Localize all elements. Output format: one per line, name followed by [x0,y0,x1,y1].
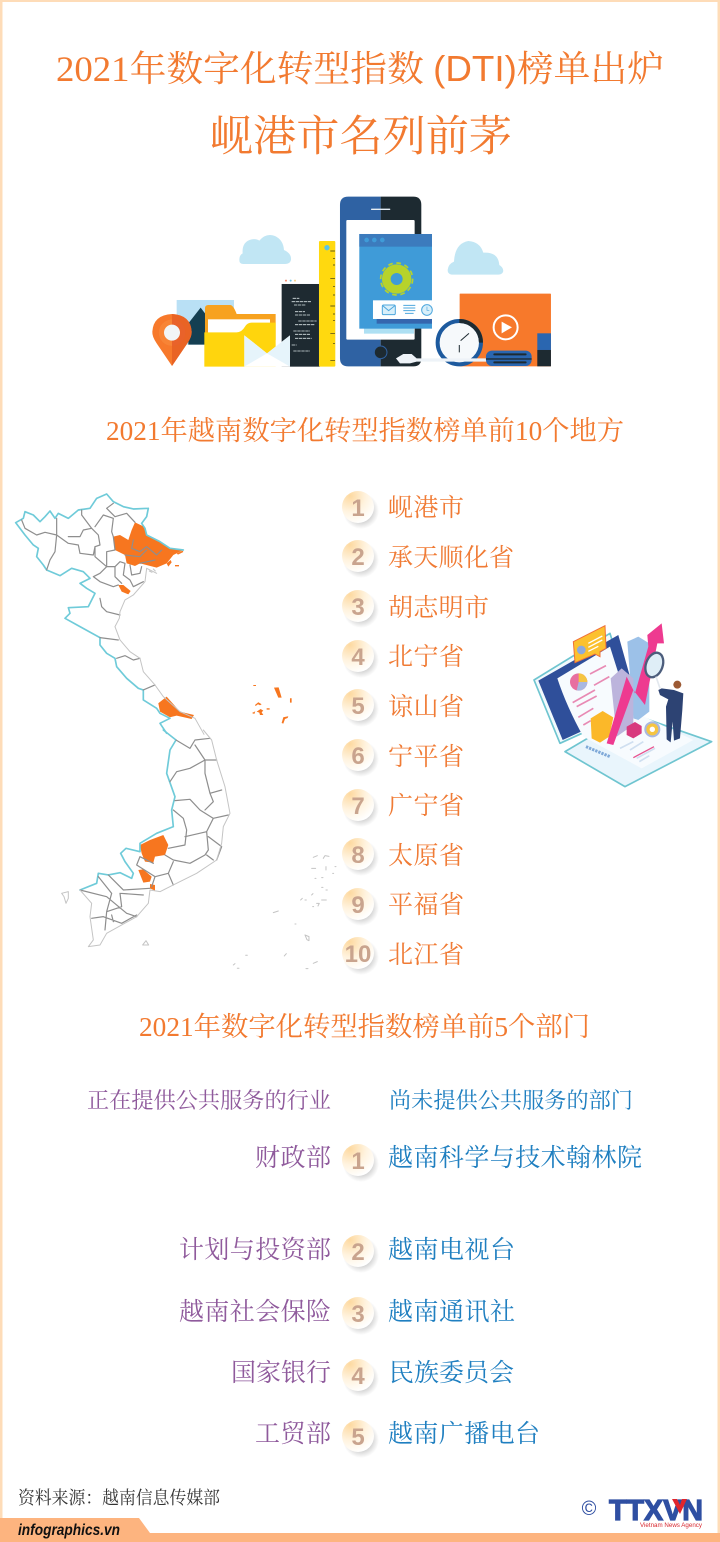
icon: cloud right [448,241,503,275]
rank 9: 9 [351,892,365,919]
column header: agencies not providing public services: 尚未提供公共服务的部门 [389,1088,633,1113]
rank 1 [342,491,464,529]
icon: folder [204,305,276,367]
row 1: 财政部 [255,1144,331,1172]
rank 4: 北宁省 [388,643,464,671]
analyst figure [658,681,683,742]
row 5: 越南广播电台 [388,1420,540,1448]
icon: app window with gear [359,234,432,334]
map: Vietnam north [16,494,292,734]
rank 7: 7 [351,793,365,820]
row 2: 越南电视台 [388,1236,515,1264]
islands [233,856,336,969]
border teal north [16,494,183,733]
row 4: 国家银行 [231,1359,331,1387]
row 1 [255,1144,642,1182]
list: top 10 localities [342,491,514,975]
row 3 [179,1297,515,1335]
laptop base [565,713,712,787]
rank 3: 胡志明市 [388,594,489,622]
coast south [62,730,230,947]
rank 4 [342,640,464,678]
row 5: 工贸部 [255,1420,331,1448]
icon: map pin [152,314,192,366]
title [56,48,664,161]
rank 2: 承天顺化省 [388,544,514,572]
rank 10 [342,937,464,975]
map: Vietnam south [62,730,336,969]
rank 9 [342,888,464,926]
rank 6 [342,739,464,777]
rank 7 [342,789,464,827]
title: 岘港市名列前茅 [210,114,512,161]
highlighted provinces north [113,522,292,724]
icon: photo card [177,300,234,345]
text lines [573,666,609,725]
logo: TTXVN: © [582,1498,597,1520]
row 2 [179,1235,515,1273]
footer bar [0,1518,720,1542]
rank 10: 北江省 [388,941,464,969]
rank 10: 10 [345,941,371,968]
icon: ruler [319,241,335,367]
rank 2 [342,540,514,578]
rank 5: 谅山省 [388,693,464,721]
footer bar: infographics.vn [18,1522,120,1539]
chart bars [591,637,659,743]
row 4 [231,1359,514,1397]
rank 1: 1 [351,495,365,522]
icon: cloud left [239,235,291,264]
rank 1: 岘港市 [388,494,464,522]
row 5: 5 [351,1424,365,1451]
row 4: 4 [351,1363,365,1390]
icon: video player [460,294,551,366]
speech bubble [573,626,606,663]
icon: code window [282,280,320,367]
rank 3 [342,590,489,628]
column header: sectors providing public services: 正在提供公共服务的行业 [87,1088,331,1113]
rank 3: 3 [351,594,365,621]
document sheet [557,647,693,768]
magnifier [642,650,666,688]
row 3: 3 [351,1301,365,1328]
border teal south [80,730,176,890]
row 1: 越南科学与技术翰林院 [388,1144,642,1172]
rank 5 [342,689,464,727]
ranking rows [179,1144,642,1458]
rank 4: 4 [351,644,365,671]
logo: TTXVN: Vietnam News Agency [640,1522,703,1529]
highlighted provinces south [138,835,168,891]
row 4: 民族委员会 [389,1359,514,1387]
province lines south [80,738,228,930]
icon: screwdriver [396,351,532,366]
laptop screen [534,633,633,743]
icon: smartphone [340,197,421,366]
row 2: 2 [351,1239,365,1266]
rank 8 [342,838,464,876]
coast north [115,568,204,734]
title: 2021年数字化转型指数 (DTI)榜单出炉 [56,48,664,89]
source note: 资料来源：越南信息传媒部 [18,1487,220,1508]
rank 9: 平福省 [388,891,464,919]
icon: gauge [438,321,481,364]
rank 2: 2 [351,544,365,571]
illustration: digital devices [152,197,551,367]
row 1: 1 [351,1148,365,1175]
icon: envelope [244,335,290,367]
bar text decoration [586,747,610,757]
row 3: 越南社会保险 [179,1298,331,1326]
logo: TTXVN: TTXVN [609,1495,703,1527]
heading: top 5 ministries: 2021年数字化转型指数榜单前5个部门 [139,1012,590,1042]
rank 8: 太原省 [388,842,464,870]
rising arrow [607,623,664,745]
rank 6: 6 [351,743,365,770]
rank 7: 广宁省 [388,792,464,820]
province lines north [22,503,162,690]
row 3: 越南通讯社 [388,1298,515,1326]
illustration: analyst with charts [534,623,712,787]
pie chart [570,673,587,691]
heading: top 10 localities: 2021年越南数字化转型指数榜单前10个地方 [106,416,624,446]
rank 5: 5 [351,693,365,720]
rank 8: 8 [351,842,365,869]
row 5 [255,1420,540,1458]
row 2: 计划与投资部 [179,1236,331,1264]
rank 6: 宁平省 [388,743,464,771]
